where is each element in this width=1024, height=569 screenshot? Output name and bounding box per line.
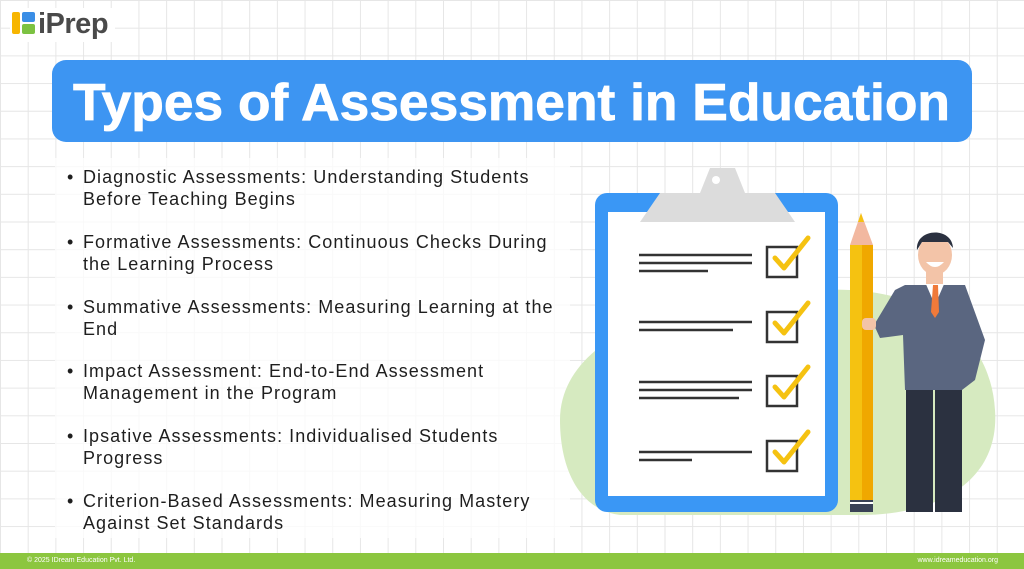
text: Ipsative Assessments: Individualised Students Progress [83,426,498,468]
list: assessment types [68,167,554,533]
logo [10,8,115,42]
text: Criterion-Based Assessments: Measuring Mastery Against Set Standards [83,491,530,533]
footer [0,553,1024,569]
text: Diagnostic Assessments: Understanding Students Before Teaching Begins [83,167,530,209]
footer: © 2025 IDream Education Pvt. Ltd. [27,557,135,564]
logo: iPrep [38,8,108,40]
clipboard [595,168,838,512]
man [862,232,985,512]
text panel background [55,158,570,538]
pencil [850,213,873,512]
title banner: Types of Assessment in Education [73,74,950,132]
footer: www.idreameducation.org [917,557,998,564]
text: Summative Assessments: Measuring Learning at the End [83,297,554,339]
icon: logo mark [12,12,35,34]
background blob [560,290,995,515]
text: Formative Assessments: Continuous Checks During the Learning Process [83,232,548,274]
text: Impact Assessment: End-to-End Assessment Management in the Program [83,361,484,403]
title banner [52,60,972,142]
